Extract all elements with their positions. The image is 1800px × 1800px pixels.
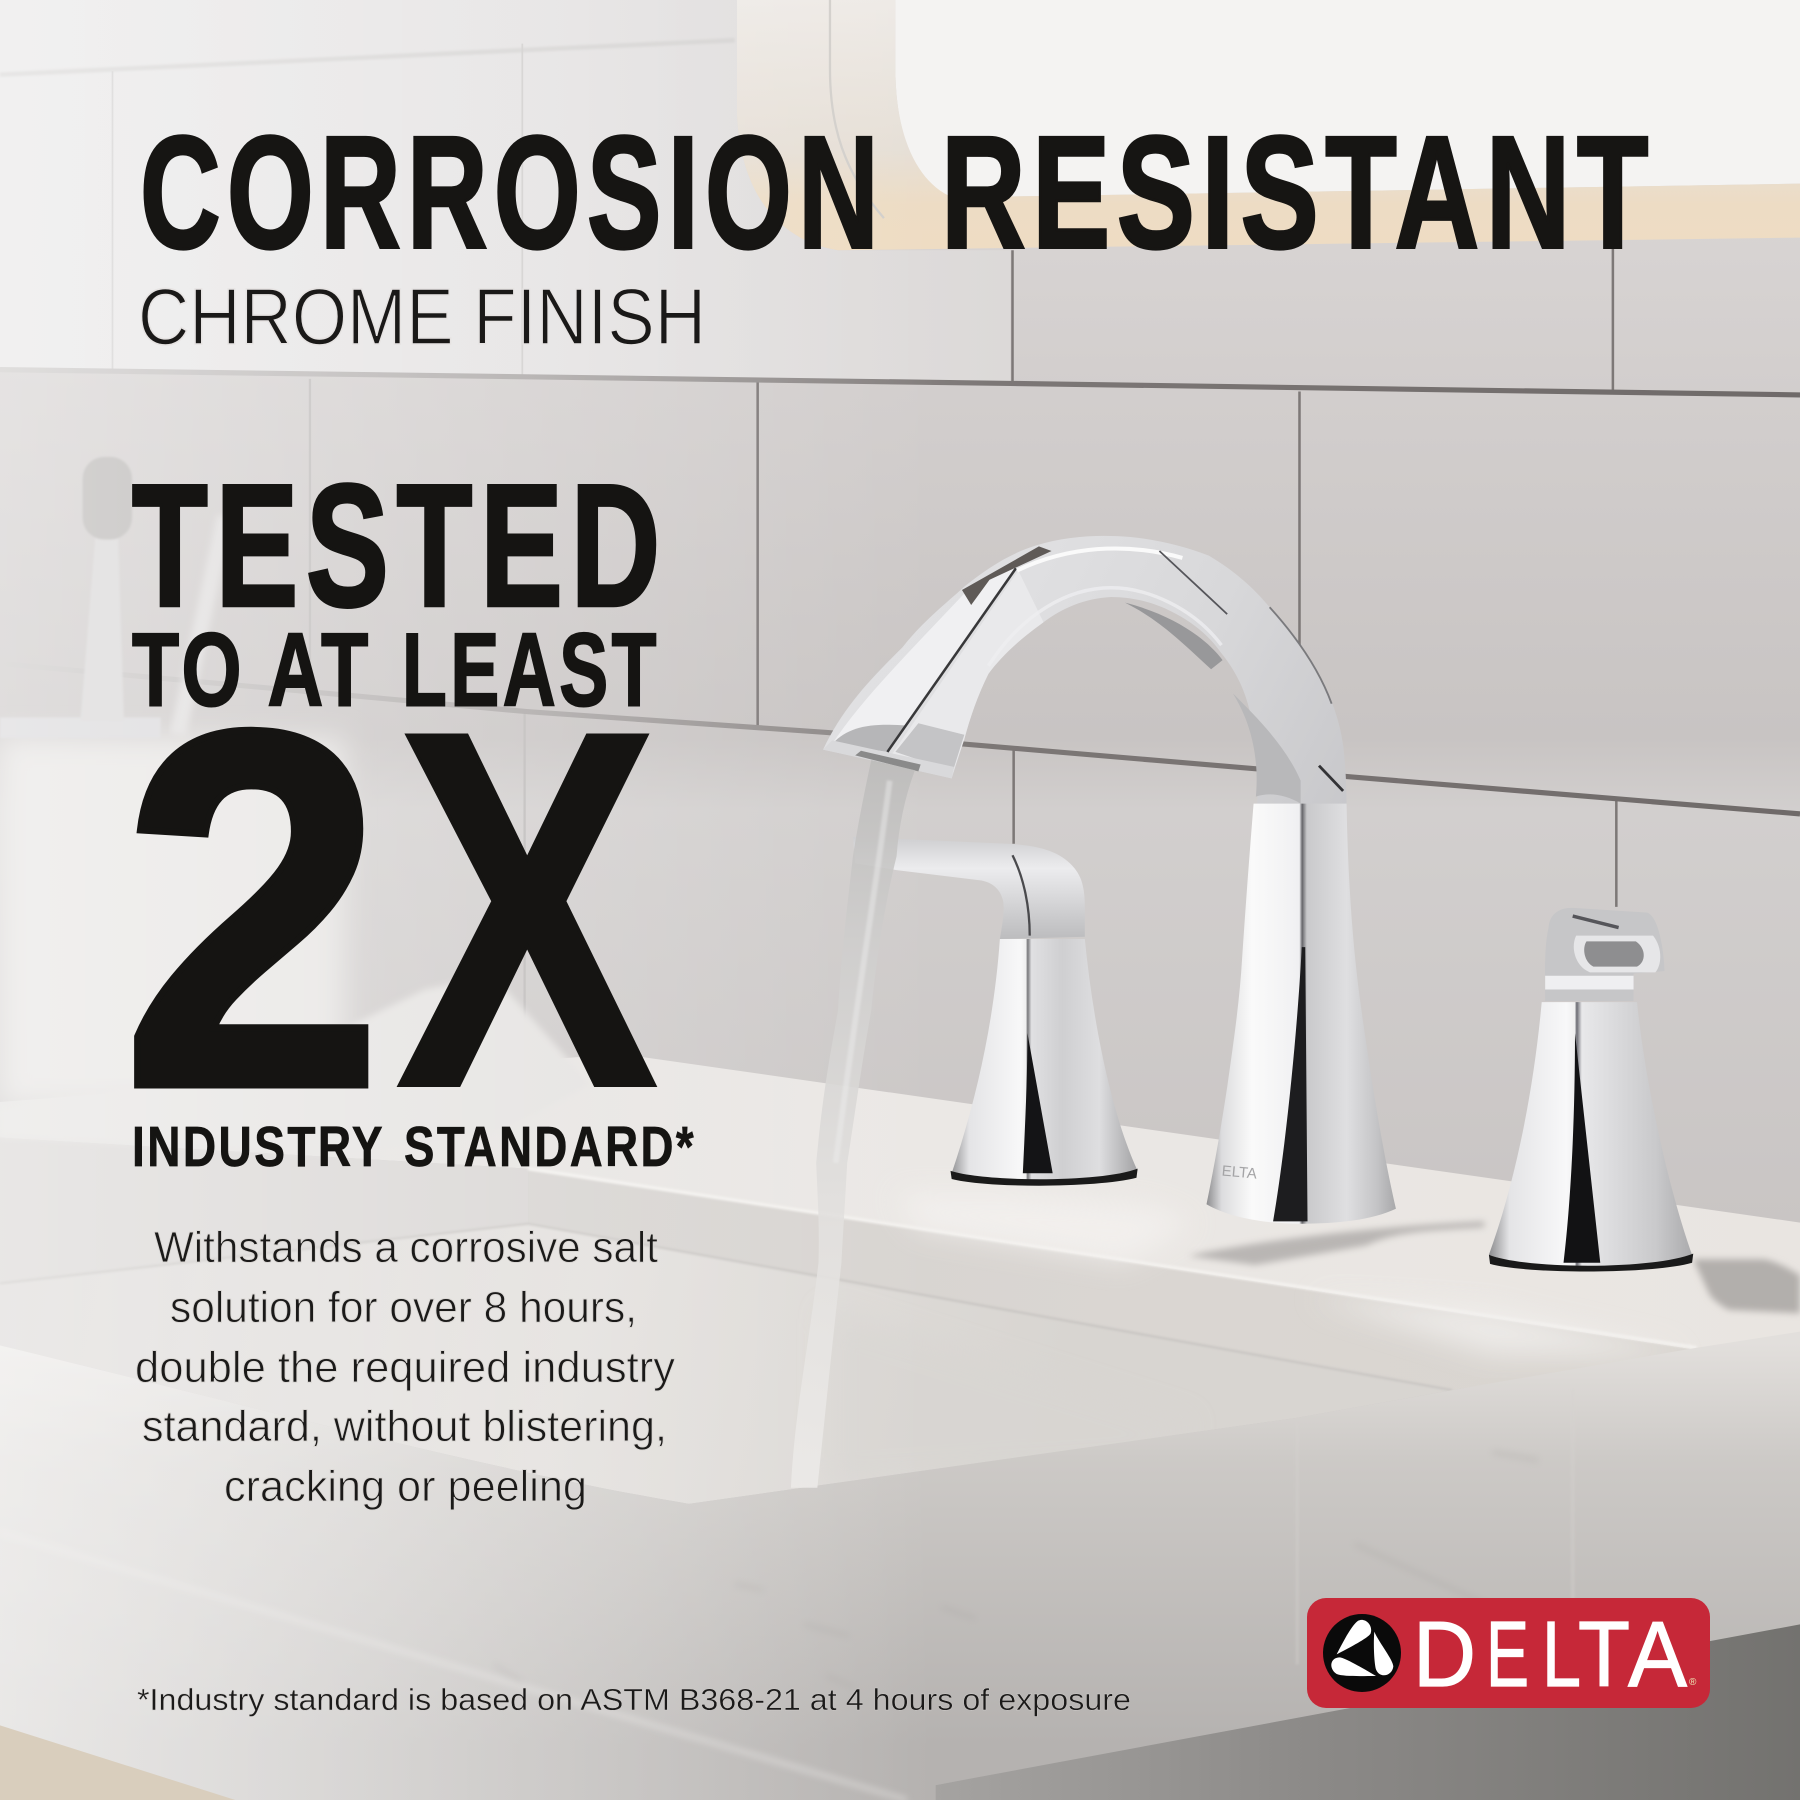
counter front dark face <box>936 1624 1800 1800</box>
spout stem <box>1207 804 1396 1224</box>
logo wordmark: D <box>1413 1602 1476 1706</box>
countertop <box>0 1054 1800 1390</box>
right handle head <box>1545 908 1665 1001</box>
logo wordmark: E <box>1486 1602 1529 1706</box>
water stream <box>791 760 915 1488</box>
spout highlights <box>823 546 1343 804</box>
body text: double the required industry <box>135 1343 675 1392</box>
title: CORROSION <box>140 102 885 282</box>
body text: standard, without blistering, <box>142 1402 667 1451</box>
left handle lever <box>853 837 1085 939</box>
lever dark edge <box>1013 855 1030 936</box>
right handle cone <box>1489 1002 1692 1266</box>
logo red badge <box>1307 1598 1710 1708</box>
blurred cup, dish and toothbrushes <box>0 457 591 1154</box>
headline: 2X: X <box>396 625 660 1193</box>
footnote: *Industry standard is based on ASTM B368-21 at 4 hours of exposure <box>137 1682 1131 1717</box>
delta mark on faucet: ELTA <box>1221 1163 1258 1183</box>
logo wordmark <box>1413 1602 1687 1706</box>
mirror and frame <box>737 0 1800 250</box>
stem dark reflection <box>1273 947 1308 1221</box>
faucet <box>823 536 1693 1272</box>
body text: solution for over 8 hours, <box>170 1283 637 1332</box>
sink basin <box>0 1224 1452 1504</box>
body text: cracking or peeling <box>224 1462 587 1511</box>
logo wordmark: T <box>1578 1602 1630 1706</box>
headline: to at least: TO AT <box>132 612 372 728</box>
subtitle: CHROME FINISH <box>138 272 706 361</box>
body text: Withstands a corrosive salt <box>154 1223 658 1272</box>
headline: 2X <box>121 625 660 1193</box>
headline: to at least: LEAST <box>402 612 660 728</box>
logo black circle with white triangle mark <box>1323 1614 1401 1692</box>
body text <box>135 1223 675 1511</box>
marble veins <box>494 1452 1538 1688</box>
left cone base <box>951 1169 1138 1186</box>
headline: 2X: 2 <box>121 625 384 1193</box>
logo wordmark: L <box>1542 1602 1581 1706</box>
Delta logo <box>1307 1598 1710 1708</box>
right cone base <box>1489 1254 1693 1272</box>
spout arch and stem <box>823 536 1347 806</box>
headline: industry standard <box>132 1115 696 1179</box>
right handle head highlights <box>1545 916 1660 990</box>
headline: tested: TESTED <box>132 448 668 642</box>
headline: industry standard: INDUSTRY <box>132 1115 385 1179</box>
headline: to at least <box>132 612 660 728</box>
left handle cone <box>952 939 1138 1180</box>
left cone dark reflection <box>1023 1033 1053 1173</box>
logo wordmark: A <box>1628 1602 1687 1706</box>
headline: industry standard: STANDARD* <box>404 1115 696 1179</box>
white fade over left side <box>0 0 941 1800</box>
logo registered mark: ® <box>1689 1677 1697 1688</box>
right cone dark reflection <box>1564 1033 1600 1263</box>
near counter edge <box>0 1332 1800 1800</box>
wood floor <box>0 1725 235 1800</box>
